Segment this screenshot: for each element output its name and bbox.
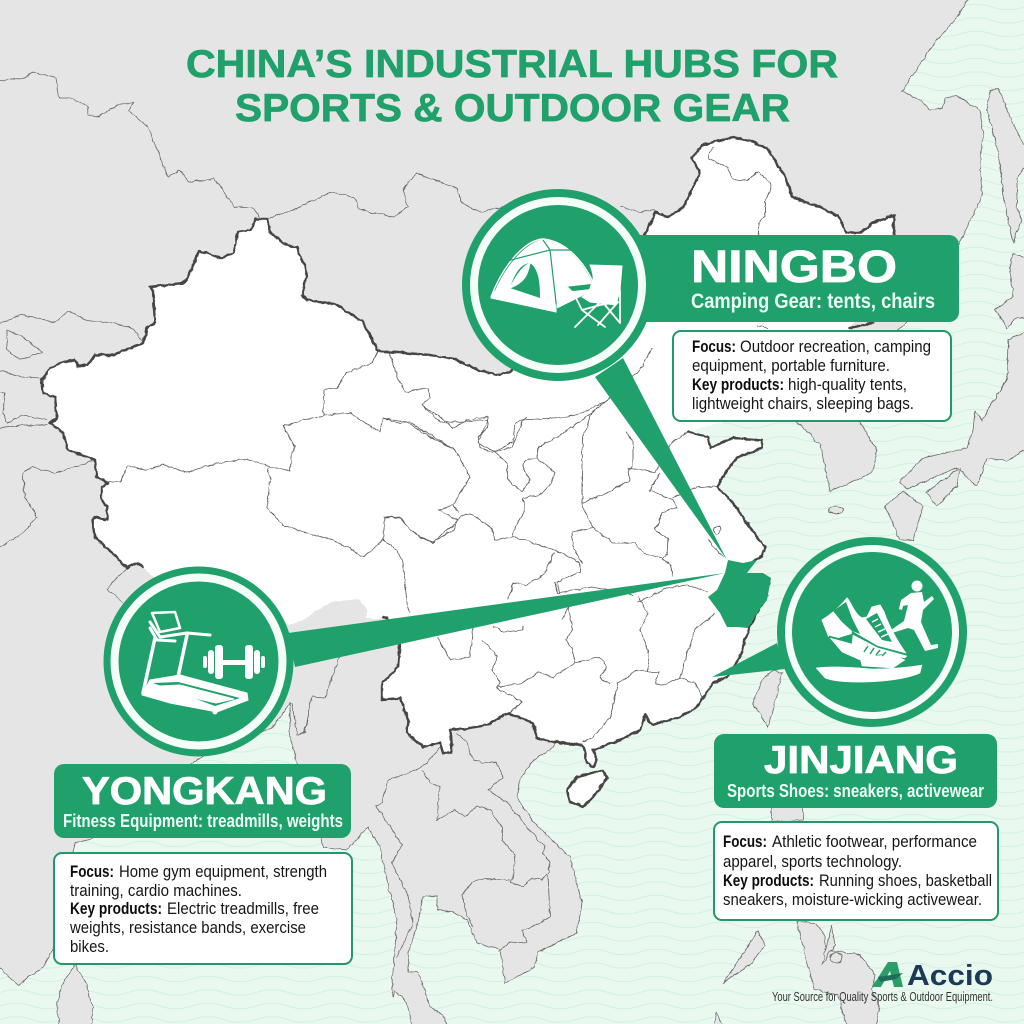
island: Hainan — [567, 770, 607, 807]
title — [186, 43, 838, 130]
icon: dumbbell — [203, 645, 265, 679]
panel: Ningbo — [462, 189, 959, 421]
Yongkang circular badge — [104, 566, 294, 756]
Ningbo name banner: NINGBO — [691, 241, 897, 292]
Yongkang details box: weights, resistance bands, exercise — [69, 919, 306, 937]
Jinjiang details box: apparel, sports technology. — [723, 853, 902, 871]
Accio logo and tagline: Accio — [907, 960, 993, 992]
Jinjiang circular badge — [777, 537, 967, 727]
Accio logo and tagline — [772, 960, 993, 1004]
Jinjiang details box: Key products: — [723, 872, 814, 890]
Ningbo name banner: Camping Gear: tents, chairs — [691, 290, 935, 313]
Jinjiang details box: Focus: — [723, 833, 767, 851]
Ningbo name banner — [600, 235, 959, 322]
icon: Accio logo mark — [872, 962, 903, 987]
Ningbo details box: Outdoor recreation, camping — [740, 338, 931, 356]
Yongkang details box: Electric treadmills, free — [167, 900, 319, 918]
province boundaries — [107, 147, 772, 742]
title: SPORTS & OUTDOOR GEAR — [235, 87, 790, 130]
island: Shikoku — [926, 468, 960, 506]
thin neighbouring borders — [0, 72, 655, 957]
icon: rear running shoe — [822, 598, 907, 655]
title: CHINA’S INDUSTRIAL HUBS FOR — [186, 43, 838, 86]
Jinjiang name banner — [714, 734, 997, 808]
Jinjiang details box: sneakers, moisture-wicking activewear. — [723, 891, 982, 909]
Jinjiang details box — [714, 822, 998, 920]
Yongkang details box: Key products: — [70, 900, 162, 918]
island: Kyushu — [885, 491, 923, 540]
callout: Ningbo wedge — [595, 358, 727, 560]
Jinjiang details box: Athletic footwear, performance — [772, 833, 977, 851]
Jinjiang details box: Running shoes, basketball — [819, 872, 992, 890]
icon: folding chair — [566, 265, 622, 327]
icon: front running shoe — [816, 633, 922, 682]
icon: runner — [891, 580, 938, 651]
icon: treadmill — [142, 612, 248, 714]
Yongkang name banner: Fitness Equipment: treadmills, weights — [63, 811, 343, 831]
Ningbo circular badge — [462, 189, 654, 381]
island: Hokkaido — [995, 253, 1024, 329]
Ningbo details box: Key products: — [692, 376, 784, 394]
Yongkang details box: training, cardio machines. — [70, 882, 242, 900]
Ningbo details box: equipment, portable furniture. — [692, 357, 890, 375]
island: Sakhalin — [987, 88, 1024, 243]
China national border — [42, 137, 895, 767]
China landmass — [42, 137, 895, 767]
island: Honshu — [900, 329, 1024, 489]
Yongkang name banner: YONGKANG — [82, 770, 327, 813]
callout: Jinjiang wedge — [712, 643, 785, 677]
Yongkang details box — [54, 853, 352, 964]
callout: Yongkang wedge — [288, 573, 725, 667]
Yongkang name banner — [54, 764, 351, 838]
Ningbo details box — [673, 331, 951, 421]
Jinjiang name banner: JINJIANG — [764, 739, 958, 782]
island: Taiwan — [753, 670, 782, 728]
icon: tent — [491, 239, 594, 312]
island: Sri Lanka — [57, 965, 93, 1024]
islands: Philippines — [712, 800, 880, 1024]
Yongkang details box: Focus: — [70, 863, 114, 881]
island: Jeju — [829, 506, 843, 514]
panel: Jinjiang — [714, 537, 998, 920]
Ningbo details box: Focus: — [692, 338, 736, 356]
Ningbo details box: lightweight chairs, sleeping bags. — [692, 395, 914, 413]
panel: Yongkang — [54, 566, 352, 964]
highlighted province: Zhejiang — [708, 560, 771, 628]
Yongkang details box: bikes. — [70, 938, 109, 956]
Yongkang details box: Home gym equipment, strength — [119, 863, 327, 881]
Ningbo details box: high-quality tents, — [788, 376, 907, 394]
